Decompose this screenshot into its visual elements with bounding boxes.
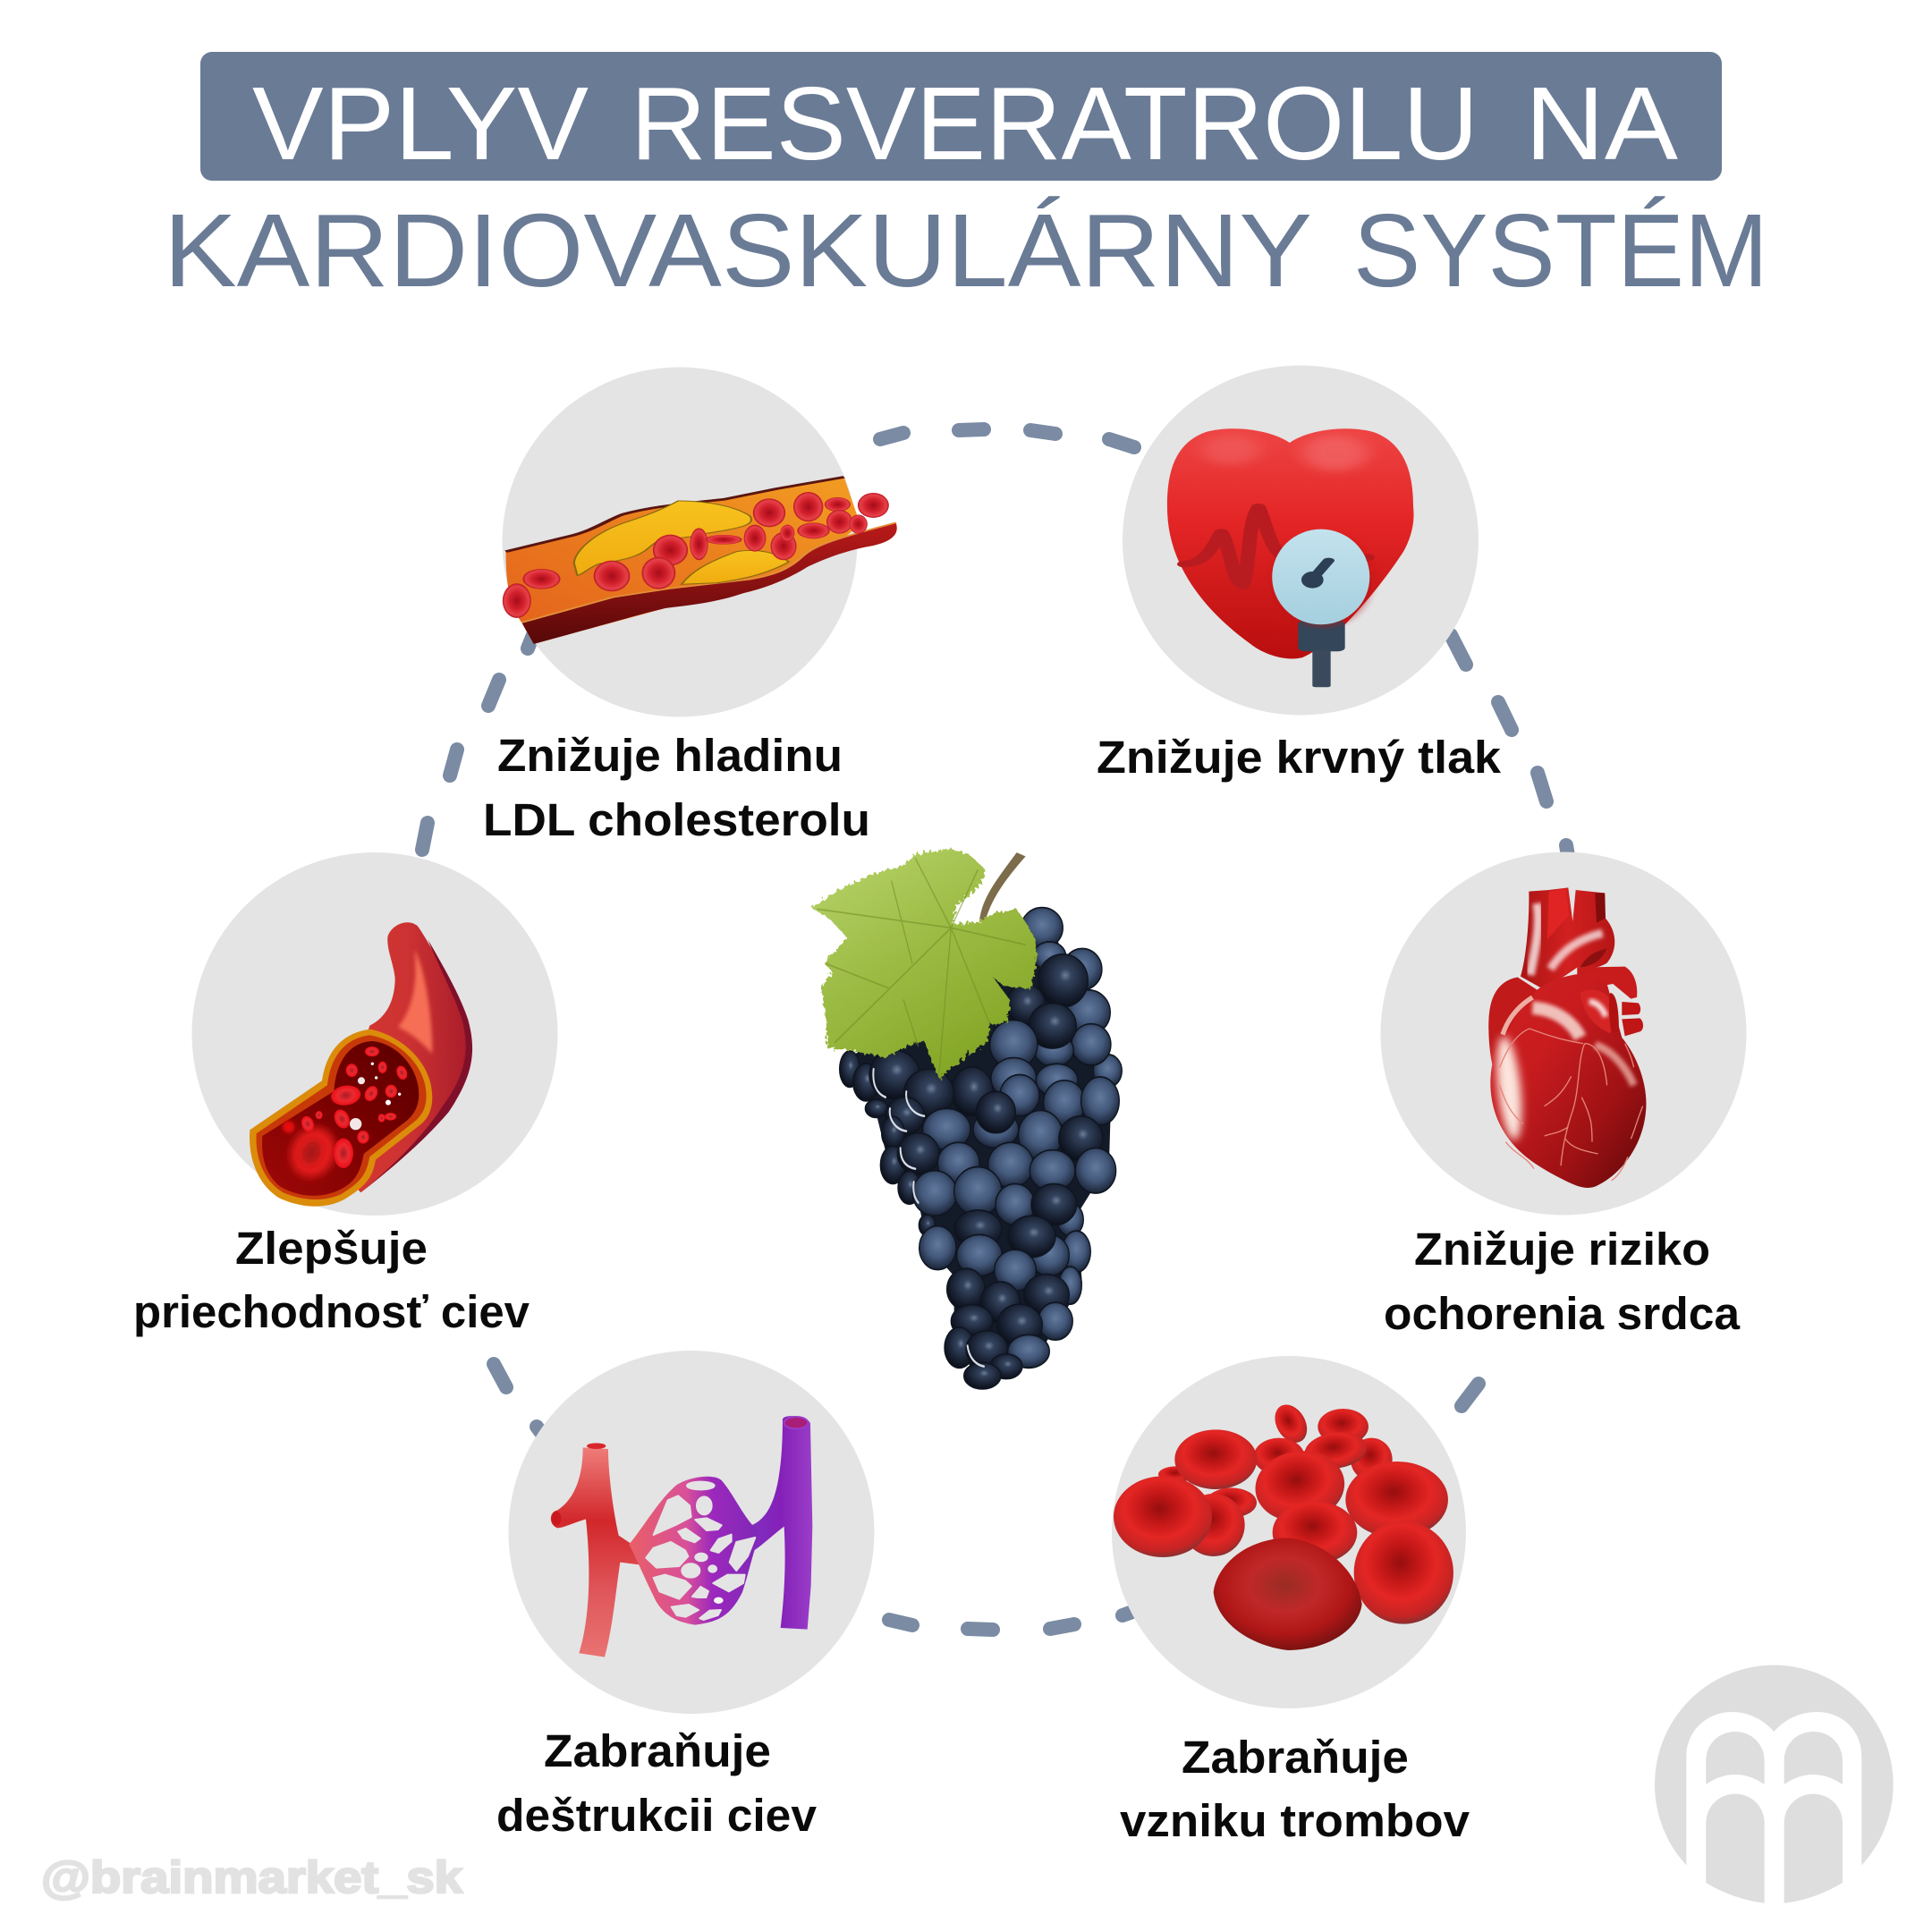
icon: capillary network bbox=[551, 1416, 812, 1657]
label: thrombi: Zabraňuje bbox=[1182, 1732, 1409, 1783]
grape leaf bbox=[811, 849, 1036, 1079]
circle: heart disease bbox=[1381, 852, 1746, 1215]
icon: red blood cells bbox=[1114, 1399, 1453, 1650]
title line 1 bbox=[252, 65, 1679, 182]
grape stem bbox=[979, 852, 1026, 920]
label: vessel destruction: Zabraňuje bbox=[544, 1725, 771, 1776]
icon: heart with blood pressure gauge bbox=[1167, 428, 1414, 687]
circle: vessel destruction bbox=[508, 1351, 875, 1714]
label: heart disease risk: ochorenia srdca bbox=[1384, 1288, 1741, 1339]
circle: blood pressure bbox=[1123, 365, 1479, 716]
label: vessel patency: Zlepšuje bbox=[235, 1223, 428, 1274]
icon: anatomical heart bbox=[1488, 887, 1646, 1188]
title line 2: SYSTÉM bbox=[1353, 192, 1768, 309]
label: LDL cholesterol bbox=[483, 730, 870, 845]
title line 2: KARDIOVASKULÁRNY bbox=[164, 192, 1312, 309]
title banner bbox=[200, 52, 1722, 181]
circle: LDL cholesterol bbox=[503, 367, 857, 717]
label: vessel destruction bbox=[496, 1725, 818, 1841]
berry rim highlights bbox=[873, 1069, 984, 1367]
label: vessel destruction: deštrukcii ciev bbox=[496, 1790, 818, 1841]
label: heart disease risk: Znižuje riziko bbox=[1414, 1224, 1710, 1275]
title line 1: VPLYV bbox=[252, 65, 589, 182]
circle: thrombi bbox=[1112, 1356, 1466, 1708]
label: thrombi bbox=[1120, 1732, 1470, 1846]
label: thrombi: vzniku trombov bbox=[1120, 1795, 1470, 1846]
title line 1: RESVERATROLU bbox=[631, 65, 1479, 182]
label: heart disease risk bbox=[1384, 1224, 1741, 1339]
icon: vessel cross-section bbox=[250, 922, 472, 1207]
logo watermark bbox=[1655, 1665, 1894, 1932]
grape berries bbox=[840, 908, 1122, 1389]
label: vessel patency bbox=[133, 1223, 530, 1337]
title line 2 bbox=[164, 192, 1768, 309]
label: LDL cholesterol: Znižuje hladinu bbox=[497, 730, 843, 781]
label: blood pressure: Znižuje krvný tlak bbox=[1097, 732, 1502, 783]
circle: vessel patency bbox=[191, 852, 558, 1216]
title line 1: NA bbox=[1525, 65, 1679, 182]
label: LDL cholesterol: LDL cholesterolu bbox=[483, 794, 870, 845]
watermark handle: @brainmarket_sk bbox=[41, 1852, 462, 1902]
dashed connecting ring bbox=[422, 429, 1571, 1630]
icon: grape bunch with leaf bbox=[811, 849, 1122, 1389]
label: vessel patency: priechodnosť ciev bbox=[133, 1286, 530, 1337]
icon: artery with cholesterol plaque bbox=[503, 477, 897, 644]
